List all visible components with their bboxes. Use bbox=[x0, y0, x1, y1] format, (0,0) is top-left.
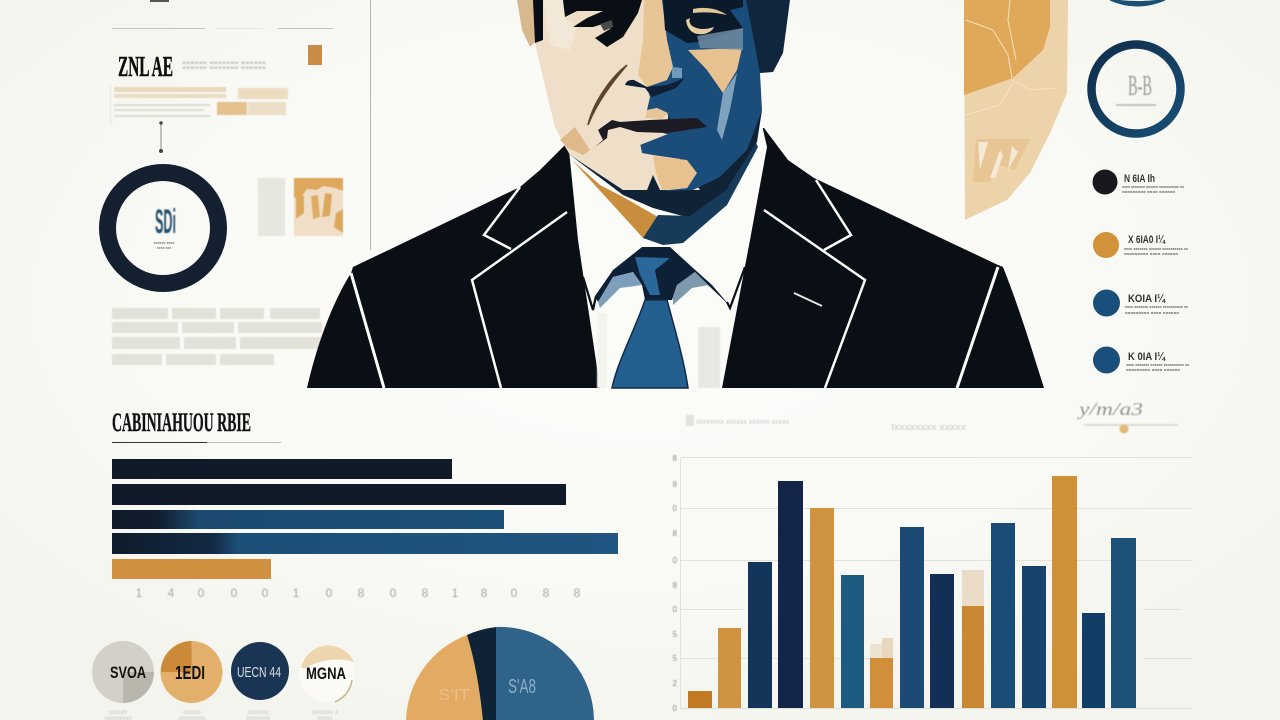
jaw tan bbox=[560, 127, 590, 155]
axis ticks: 0 bbox=[198, 586, 205, 600]
right brow highlight bbox=[693, 8, 727, 15]
connector arrow bbox=[159, 121, 163, 153]
legend item: dark blue: xxxx xxxxxxx xxxxxx xxxxxxxxxx xx bbox=[1126, 362, 1189, 367]
neck shadow bbox=[570, 100, 762, 218]
axis ticks: 4 bbox=[168, 586, 175, 600]
caption 1 bbox=[686, 415, 789, 426]
y axis labels: 8 bbox=[673, 529, 678, 538]
faded chart captions bbox=[686, 399, 1178, 434]
axis ticks: 1 bbox=[136, 586, 143, 600]
circle captions: xxxxxxx bbox=[248, 710, 268, 716]
axis ticks bbox=[136, 586, 581, 600]
heading: top left: ZNL AE bbox=[118, 51, 173, 83]
axis ticks: 0 bbox=[390, 586, 397, 600]
collar notches bbox=[583, 267, 745, 310]
gridlines bbox=[680, 457, 1193, 709]
circle: navy bbox=[231, 642, 289, 700]
left eye and brow bbox=[563, 0, 642, 47]
nostril bbox=[625, 78, 685, 97]
circle captions: xxxxxxx x bbox=[312, 710, 338, 716]
y axis labels: 0 bbox=[673, 704, 678, 713]
bar 2 bbox=[112, 484, 566, 505]
caption 3 bbox=[1076, 399, 1178, 434]
legend item: blue: xxxxxxxxx xxxx xxxxxx bbox=[1125, 310, 1179, 315]
pie chart: S'IT bbox=[438, 687, 470, 704]
axis ticks: 8 bbox=[422, 586, 429, 600]
shirt shadows bbox=[597, 313, 720, 388]
wing left bbox=[598, 272, 642, 308]
right eye smudge bbox=[697, 28, 743, 50]
circle: orange: 1EDI bbox=[175, 663, 205, 683]
legend item: blue: KOIA I¼ bbox=[1128, 293, 1166, 305]
neck blue bbox=[643, 143, 758, 245]
lower lip cream bbox=[640, 134, 668, 145]
face cream bbox=[535, 0, 700, 190]
smile line bbox=[588, 65, 627, 125]
bar chart heading: CABINIAHUOU RBIE bbox=[112, 408, 251, 437]
collar underside bbox=[595, 247, 730, 306]
bar 1 bbox=[112, 459, 452, 479]
tie bbox=[583, 247, 745, 388]
caption 3: y/m/a3 bbox=[1076, 399, 1143, 419]
y axis labels: 5 bbox=[673, 630, 678, 639]
horizontal bar chart bbox=[112, 459, 618, 600]
lapel left outline bbox=[472, 187, 567, 388]
bar 3 bbox=[112, 510, 504, 529]
cheek streak bbox=[717, 73, 737, 140]
hair right bbox=[746, 0, 790, 73]
forehead highlight bbox=[543, 0, 577, 50]
y axis labels: 8 bbox=[673, 480, 678, 489]
legend bbox=[1092, 170, 1189, 374]
donut caption: xxxxxx xxxx bbox=[153, 240, 175, 245]
circle: cream bbox=[299, 645, 355, 702]
bar 5 bbox=[112, 559, 271, 579]
y axis labels: 0 bbox=[673, 504, 678, 513]
orange small square bbox=[308, 45, 322, 65]
legend item: orange: xxxx xxxxxxx xxxxxx xxxxxxxxxx xx bbox=[1124, 246, 1188, 251]
legend item: orange: xxxxxxxxx xxxx xxxxxx bbox=[1124, 251, 1178, 256]
left eye lid bbox=[600, 20, 613, 31]
chin highlight bbox=[653, 156, 697, 190]
ear bbox=[517, 0, 537, 47]
axis ticks: 8 bbox=[543, 586, 550, 600]
nose highlight bbox=[672, 67, 682, 78]
bars bbox=[688, 691, 712, 708]
axis ticks: 1 bbox=[452, 586, 459, 600]
bar 4 bbox=[112, 533, 618, 554]
circle: cream: MGNA bbox=[306, 664, 346, 683]
y axis labels: 2 bbox=[673, 679, 678, 688]
shirt bbox=[568, 125, 767, 388]
right eye and brow bbox=[663, 0, 743, 43]
circle: grey bbox=[92, 641, 154, 703]
y axis labels: 0 bbox=[673, 556, 678, 565]
donut: right blue ring bbox=[1092, 44, 1180, 134]
legend item: dark blue: xxxxxxxxx xxxx xxxxxx bbox=[1126, 367, 1180, 372]
legend item: dark blue bbox=[1093, 346, 1189, 374]
y axis labels: 0 bbox=[673, 605, 678, 614]
pie chart bbox=[406, 627, 594, 720]
donut: left dark ring bbox=[108, 172, 218, 284]
ring value: B-B bbox=[1128, 71, 1152, 102]
map lower pattern bbox=[973, 139, 1030, 182]
top left clipped mark bbox=[150, 0, 169, 2]
pocket mark bbox=[794, 293, 822, 306]
y axis labels: 5 bbox=[673, 654, 678, 663]
legend item: dark blue: K 0IA I¼ bbox=[1128, 351, 1166, 363]
right eye socket bbox=[686, 18, 714, 34]
ring caption bbox=[1116, 104, 1156, 106]
axis ticks: 0 bbox=[511, 586, 518, 600]
caption 1: xxxxxxxx xxxxxx xxxxxx xxxxx bbox=[696, 419, 789, 426]
lapel right outline bbox=[764, 180, 865, 388]
portrait illustration bbox=[307, 0, 1044, 388]
text block: left paragraph bbox=[112, 308, 322, 365]
legend item: blue: xxxx xxxxxxx xxxxxx xxxxxxxxxx xx bbox=[1125, 304, 1188, 309]
panel: top left summary bbox=[110, 45, 322, 124]
axis ticks: 0 bbox=[231, 586, 238, 600]
face blue bbox=[640, 0, 762, 191]
y axis labels: 8 bbox=[673, 581, 678, 590]
hair left bbox=[533, 0, 543, 43]
axis ticks: 1 bbox=[293, 586, 300, 600]
small caption: xxxxxx xxxxxxx xxxxxx bbox=[182, 60, 267, 65]
circle: navy: UECN 44 bbox=[237, 664, 281, 681]
grey placeholder block bbox=[258, 178, 285, 236]
orange pattern tile bbox=[294, 178, 343, 236]
clipped top ring bbox=[1110, 0, 1165, 6]
small caption bbox=[182, 60, 267, 70]
map cracks bbox=[965, 0, 1055, 115]
legend item: blue bbox=[1093, 290, 1188, 316]
mouth bbox=[595, 118, 707, 147]
upper lip highlight bbox=[645, 108, 668, 119]
axis ticks: 8 bbox=[358, 586, 365, 600]
y axis labels bbox=[673, 454, 678, 713]
panel: map shape bbox=[964, 0, 1068, 220]
axis ticks: 8 bbox=[481, 586, 488, 600]
stat circles bbox=[92, 641, 355, 720]
axis ticks: 8 bbox=[574, 586, 581, 600]
legend item: black: xxxx xxxxxxx xxxxxx xxxxxxxxxx xx bbox=[1122, 184, 1184, 189]
donut caption bbox=[153, 240, 175, 250]
map inner region bbox=[964, 0, 1050, 95]
legend item: orange: X 6IA0 I¼ bbox=[1128, 234, 1166, 246]
sleeve seam left bbox=[351, 273, 384, 388]
wing right bbox=[673, 272, 708, 305]
y axis labels: 8 bbox=[673, 454, 678, 463]
tan info bands bbox=[110, 86, 288, 124]
vertical bar chart bbox=[673, 454, 1193, 713]
cheek tan bbox=[688, 48, 742, 93]
neck orange bbox=[572, 160, 658, 238]
donut caption: xxxx xxx bbox=[156, 245, 172, 250]
pie labels: S'A8 bbox=[508, 676, 536, 698]
legend item: black bbox=[1092, 170, 1184, 194]
circle captions: xxxxxx bbox=[109, 710, 127, 716]
sleeve seam right bbox=[957, 267, 998, 388]
circle: grey: SVOA bbox=[110, 663, 146, 682]
tie blade bbox=[612, 300, 688, 388]
circle captions bbox=[104, 710, 338, 720]
small caption: xxxxxx xxxxxxx xxxxxx bbox=[182, 65, 267, 70]
nose tan bbox=[638, 0, 673, 87]
jacket bbox=[307, 128, 1044, 388]
caption 2: Ixxxxxxxx xxxxx bbox=[891, 422, 967, 432]
circle: orange bbox=[160, 641, 222, 703]
legend item: black: N 6IA Ih bbox=[1124, 173, 1155, 185]
legend item: black: xxxxxxxxx xxxx xxxxxx bbox=[1122, 189, 1175, 194]
knot bbox=[635, 257, 670, 295]
donut: left dark ring: SDi bbox=[155, 203, 176, 241]
legend item: orange bbox=[1093, 232, 1188, 258]
circle captions: xxxxxx bbox=[183, 710, 201, 716]
axis ticks: 0 bbox=[326, 586, 333, 600]
axis ticks: 0 bbox=[262, 586, 269, 600]
